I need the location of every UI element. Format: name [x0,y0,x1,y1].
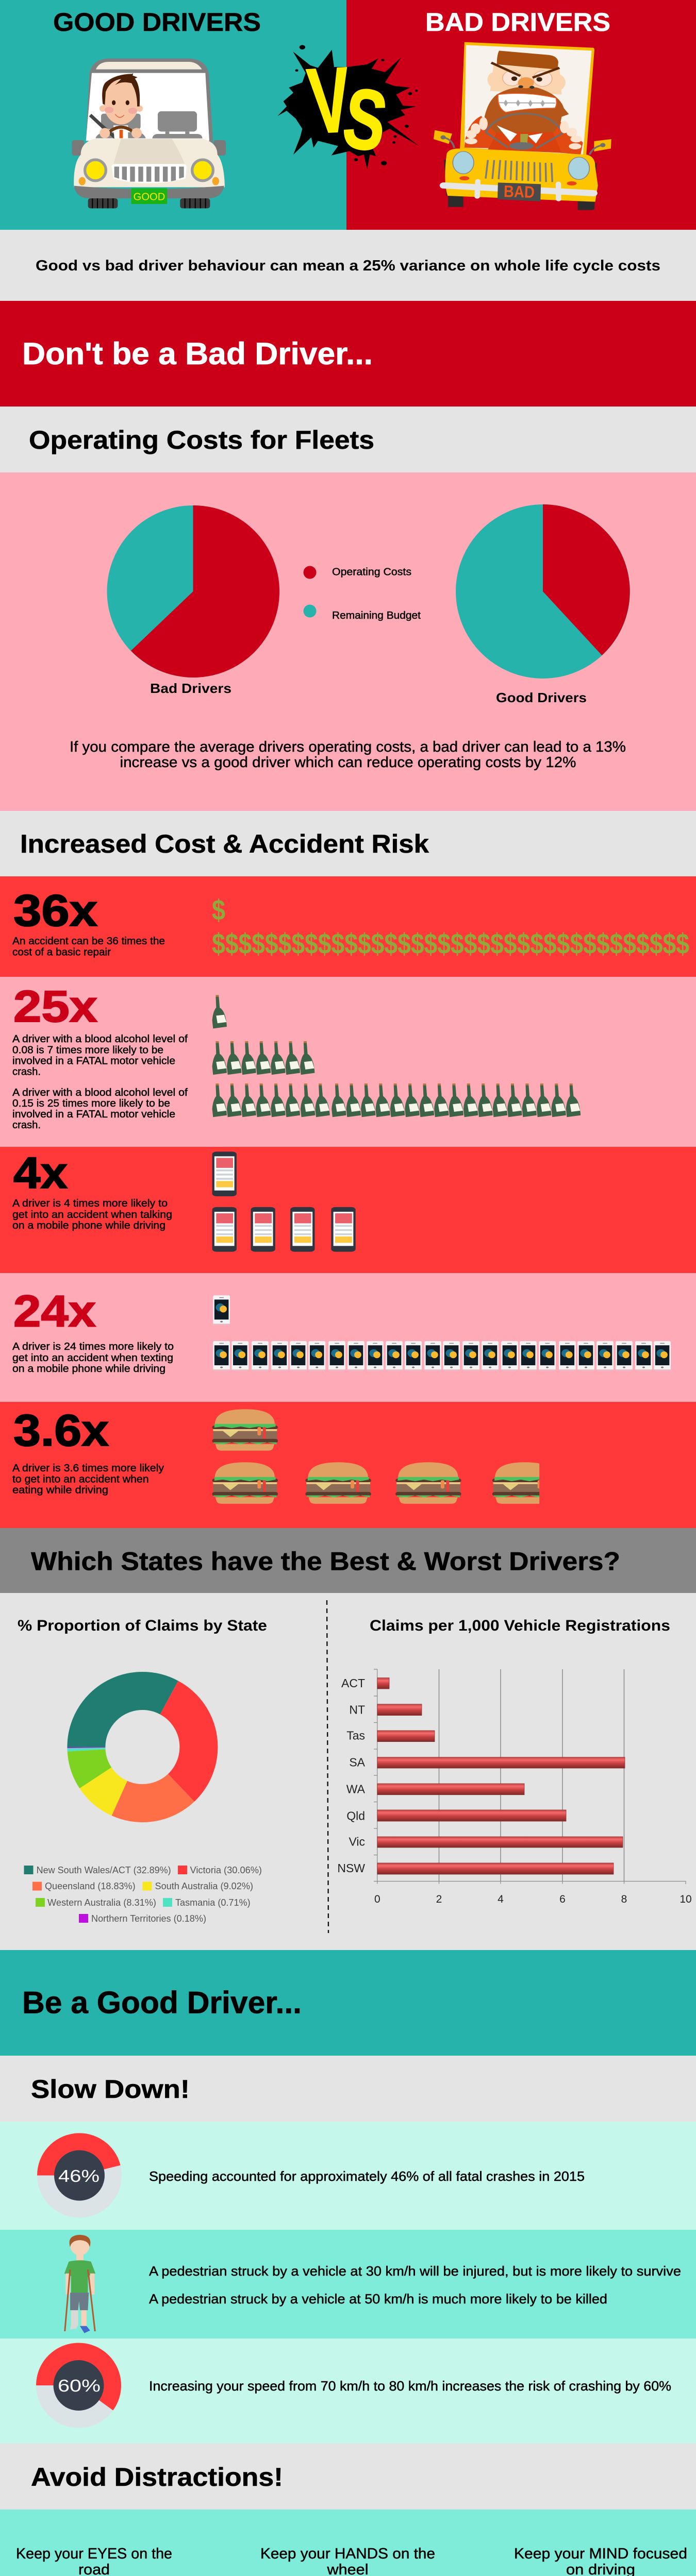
pie chart: bad drivers [107,505,279,677]
stat: 4x: 4x [13,1148,68,1198]
heading: operating costs for fleets: Operating Costs for Fleets [29,426,374,454]
panel: 60 percent risk [0,2338,696,2444]
text: texting on a phone [12,1341,174,1375]
heading: good drivers: GOOD DRIVERS [53,8,261,37]
gauge: 46 percent [37,2133,122,2217]
text: accident cost [12,936,165,958]
illustration: bad driver in car [434,42,611,210]
gauge: 46 percent: 46% [58,2166,100,2185]
donut chart: claims by state [86,1691,198,1803]
heading: don't be a bad driver: Don't be a Bad Driver... [22,336,373,371]
text: texting on a phone: get into an accident when texting [12,1352,173,1364]
text: keep your eyes: Keep your EYES on the [16,2546,172,2562]
label: good drivers: Good Drivers [496,690,587,705]
text block: cost comparison: increase vs a good driver which can reduce operating costs by 12% [120,754,576,771]
panel: don't be a bad driver banner [0,301,696,406]
bar chart: claims per 1000 registrations: 8 [621,1893,627,1905]
text: keep your hands [260,2546,435,2576]
bar chart: claims per 1000 registrations: WA [346,1783,366,1796]
illustration: good driver in car: GOOD [134,191,165,202]
bar chart: claims per 1000 registrations: ACT [341,1676,365,1690]
text: 0.08 blood alcohol: A driver with a blood alcohol level of [12,1033,188,1045]
legend: pie colours [303,566,421,621]
bar chart: claims per 1000 registrations: 2 [436,1893,442,1905]
heading: proportion of claims: % Proportion of Claims by State [18,1617,267,1634]
legend: pie colours: Operating Costs [332,567,411,578]
bar chart: claims per 1000 registrations [337,1669,692,1905]
heading: be a good driver: Be a Good Driver... [22,1986,302,2020]
bar chart: claims per 1000 registrations: Tas [346,1729,365,1742]
icon rows: phones [212,1151,356,1252]
text: 0.08 blood alcohol: crash. [12,1066,41,1078]
text: 0.15 blood alcohol: crash. [12,1120,41,1131]
text: speeding fatal crashes: Speeding accounted for approximately 46% of all fatal crashes in 2015 [149,2168,585,2184]
legend: states: Western Australia (8.31%) [47,1897,156,1908]
heading: slow down: Slow Down! [31,2075,190,2104]
illustration: good driver in car [72,58,226,208]
text: accident cost: An accident can be 36 times the [12,936,165,947]
panel: be a good driver banner [0,1950,696,2056]
stat: 24x: 24x [13,1287,96,1336]
legend: pie colours: Remaining Budget [332,610,421,621]
bar chart: claims per 1000 registrations: 4 [498,1893,504,1905]
icon rows: smartphones [213,1295,671,1370]
icon: person on crutches [64,2235,95,2333]
text: speed crash risk: Increasing your speed from 70 km/h to 80 km/h increases the risk of crashing by 60% [149,2378,671,2394]
panel: slow down heading [0,2056,696,2122]
icon: one dollar: $ [212,893,225,926]
text: keep your hands: Keep your HANDS on the [260,2546,435,2562]
bar chart: claims per 1000 registrations: 6 [559,1893,566,1905]
illustration: bad driver in car: BAD [503,182,535,201]
panel: 36x cost [0,876,696,977]
text block: cost comparison: If you compare the average drivers operating costs, a bad driver can lead to a 13% [70,739,626,755]
bar chart: claims per 1000 registrations: 0 [374,1893,380,1905]
text: texting on a phone: A driver is 24 times more likely to [12,1341,174,1352]
stat: 3.6x: 3.6x [13,1406,109,1455]
bar chart: claims per 1000 registrations: NT [349,1703,365,1717]
text: 0.08 blood alcohol [12,1033,188,1078]
panel: avoid distractions heading [0,2444,696,2510]
panel: operating costs heading [0,406,696,472]
panel: header good vs bad drivers [0,0,696,230]
text: talking on a phone: A driver is 4 times more likely to [12,1198,168,1209]
text: talking on a phone: on a mobile phone while driving [12,1220,165,1231]
text: talking on a phone [12,1198,172,1231]
text: texting on a phone: on a mobile phone while driving [12,1363,165,1375]
legend: states: Victoria (30.06%) [190,1865,262,1875]
text: eating while driving [12,1463,164,1496]
panel: keep eyes hands mind [0,2510,696,2576]
text: eating while driving: A driver is 3.6 times more likely [12,1463,164,1474]
bar chart: claims per 1000 registrations: NSW [337,1861,365,1875]
panel: pedestrian [0,2230,696,2338]
panel: state charts [0,1593,696,1950]
heading: best and worst drivers: Which States have the Best & Worst Drivers? [31,1547,620,1575]
bar chart: claims per 1000 registrations: 10 [680,1893,692,1905]
gauge: 60 percent [36,2343,121,2428]
panel: 4x mobile talking [0,1147,696,1273]
stat: 25x: 25x [13,982,97,1031]
text: keep your eyes [16,2546,172,2576]
heading: claims per 1000: Claims per 1,000 Vehicle Registrations [370,1617,670,1634]
icon rows: burgers [212,1409,558,1504]
text: 0.15 blood alcohol: 0.15 is 25 times more likely to be [12,1098,170,1109]
legend: states [24,1865,262,1924]
text: 0.15 blood alcohol: A driver with a blood alcohol level of [12,1087,188,1098]
text: pedestrian survival [149,2263,681,2307]
panel: whole life cycle cost statement [0,230,696,301]
panel: 24x texting [0,1273,696,1402]
panel: 46 percent speeding [0,2122,696,2230]
bar chart: claims per 1000 registrations: Qld [346,1809,365,1823]
icon rows: bottles [212,995,581,1117]
illustration: VS splat: V [304,48,356,152]
legend: states: New South Wales/ACT (32.89%) [37,1865,171,1875]
panel: states heading [0,1528,696,1593]
text: 0.08 blood alcohol: 0.08 is 7 times more likely to be [12,1045,163,1056]
text: eating while driving: to get into an accident when [12,1473,148,1485]
illustration: VS splat [278,45,419,170]
text: 0.15 blood alcohol: involved in a FATAL motor vehicle [12,1109,175,1120]
text block: variance statement: Good vs bad driver behaviour can mean a 25% variance on whole life cycle costs [36,258,660,274]
bar chart: claims per 1000 registrations: Vic [349,1835,365,1849]
pie chart: good drivers [456,504,630,679]
text: 0.15 blood alcohol [12,1087,188,1131]
heading: avoid distractions: Avoid Distractions! [31,2463,283,2492]
legend: states: Queensland (18.83%) [45,1881,136,1891]
heading: increased cost and accident risk: Increased Cost & Accident Risk [20,829,429,858]
text: eating while driving: eating while driving [12,1485,108,1496]
text: talking on a phone: get into an accident when talking [12,1209,172,1221]
illustration: VS splat: S [338,70,393,170]
text: pedestrian survival: A pedestrian struck by a vehicle at 50 km/h is much more likely to be killed [149,2291,607,2307]
panel: operating cost pies [0,472,696,811]
legend: states: South Australia (9.02%) [155,1881,253,1891]
panel: 25x alcohol [0,977,696,1147]
bar chart: claims per 1000 registrations: SA [349,1756,366,1769]
panel: 3.6x eating [0,1402,696,1528]
text block: cost comparison [70,739,626,771]
gauge: 60 percent: 60% [58,2376,101,2395]
legend: states: Tasmania (0.71%) [175,1897,251,1908]
text: keep your mind: Keep your MIND focused [514,2546,687,2562]
heading: bad drivers: BAD DRIVERS [425,8,610,37]
text: keep your mind [514,2546,687,2576]
text: 0.08 blood alcohol: involved in a FATAL motor vehicle [12,1056,175,1067]
panel: increased cost heading [0,811,696,876]
legend: states: Northern Territories (0.18%) [91,1913,206,1924]
text: pedestrian survival: A pedestrian struck by a vehicle at 30 km/h will be injured, but is more likely to survive [149,2263,681,2279]
stat: 36x: 36x [13,886,97,936]
text: accident cost: cost of a basic repair [12,947,111,958]
label: bad drivers: Bad Drivers [150,681,231,696]
